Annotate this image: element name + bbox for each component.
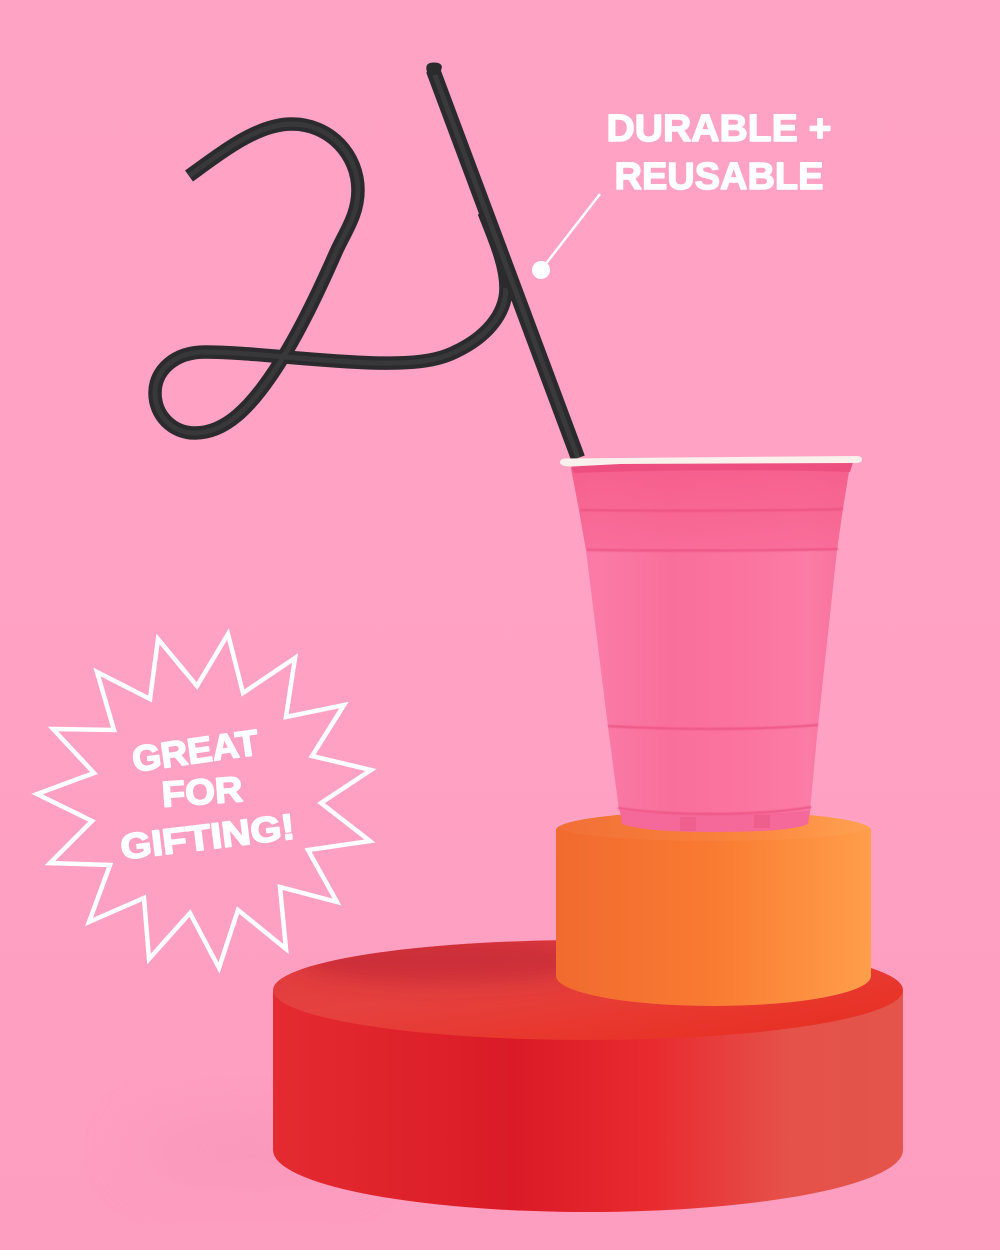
starburst badge: [37, 634, 371, 968]
cup ridges: [580, 509, 843, 814]
orange cylinder: [556, 811, 871, 1006]
cup white rim: [560, 456, 862, 466]
callout text: [606, 108, 832, 198]
cup body: [571, 465, 850, 814]
badge text: FOR: [160, 768, 244, 815]
cup inner rim shadow: [570, 462, 853, 473]
callout dot: [532, 261, 550, 279]
floor shadow: [130, 1114, 370, 1186]
red cylinder: [273, 936, 903, 1212]
callout: durable + reusable: [532, 108, 832, 279]
starburst outline: [37, 634, 371, 968]
party cup: [560, 456, 862, 832]
badge text: GREAT: [130, 721, 261, 780]
badge text: [118, 721, 297, 868]
straw: [155, 62, 578, 458]
badge text: GIFTING!: [118, 806, 297, 868]
callout text: REUSABLE: [614, 156, 824, 198]
callout leader line: [541, 194, 600, 270]
cup base: [619, 806, 811, 832]
callout text: DURABLE +: [606, 108, 832, 150]
straw loop: [155, 124, 506, 433]
cup base feet: [680, 815, 770, 831]
cup upper shading: [571, 465, 850, 550]
straw stem: [426, 62, 578, 458]
podium stack: [130, 811, 903, 1212]
